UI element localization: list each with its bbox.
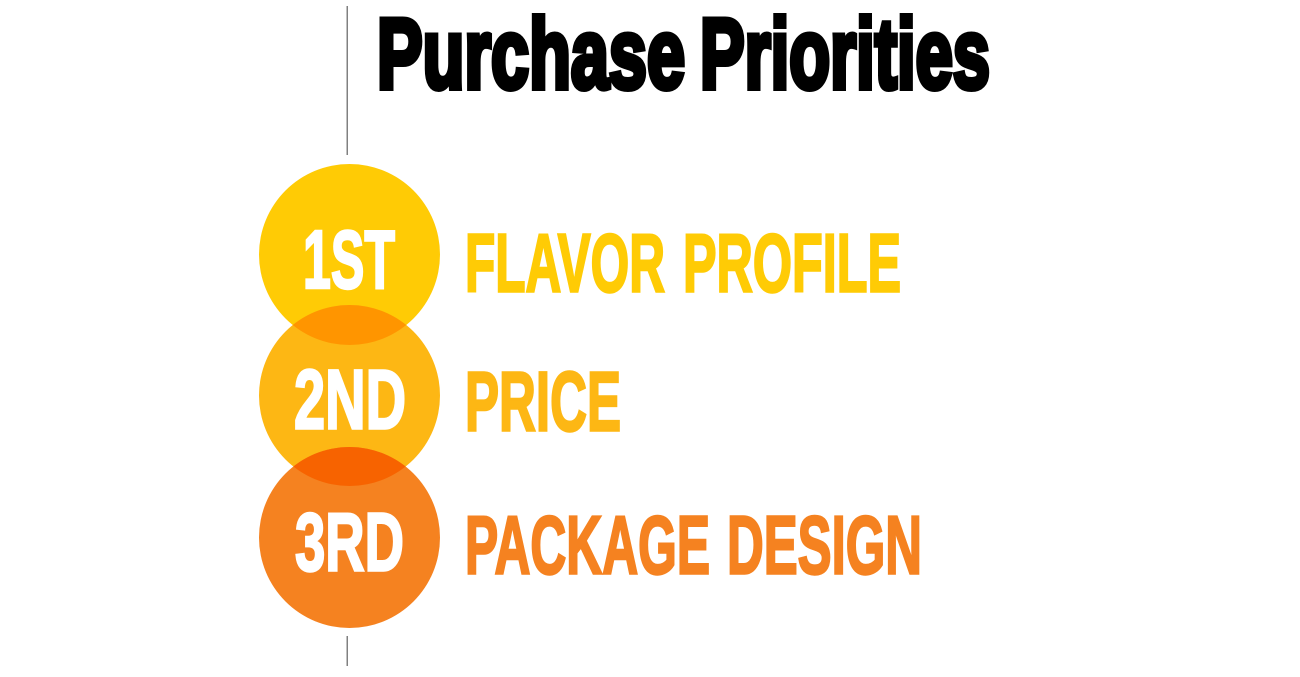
- priority: flavor profile: PROFILE: [683, 216, 901, 310]
- title: Purchase: [377, 0, 685, 109]
- title: Priorities: [700, 0, 990, 109]
- priority: package design: PACKAGE: [465, 498, 710, 592]
- priority: package design: DESIGN: [727, 498, 922, 592]
- circle: 2nd: [259, 305, 440, 486]
- circle: 3rd: [259, 447, 440, 628]
- top vertical line: [346, 6, 348, 155]
- overlap: 2nd and 3rd: [294, 447, 406, 486]
- circle: 1st: [259, 164, 440, 345]
- bottom vertical line: [346, 636, 348, 666]
- badge label: 2nd: 2ND: [294, 352, 406, 446]
- priority: price: PRICE: [465, 354, 621, 448]
- overlap: 1st and 2nd: [293, 305, 406, 345]
- badge label: 3rd: 3RD: [295, 496, 404, 588]
- infographic: purchase priorities: [259, 6, 990, 666]
- badge label: 1st: 1ST: [303, 213, 395, 306]
- priority: flavor profile: FLAVOR: [465, 216, 665, 310]
